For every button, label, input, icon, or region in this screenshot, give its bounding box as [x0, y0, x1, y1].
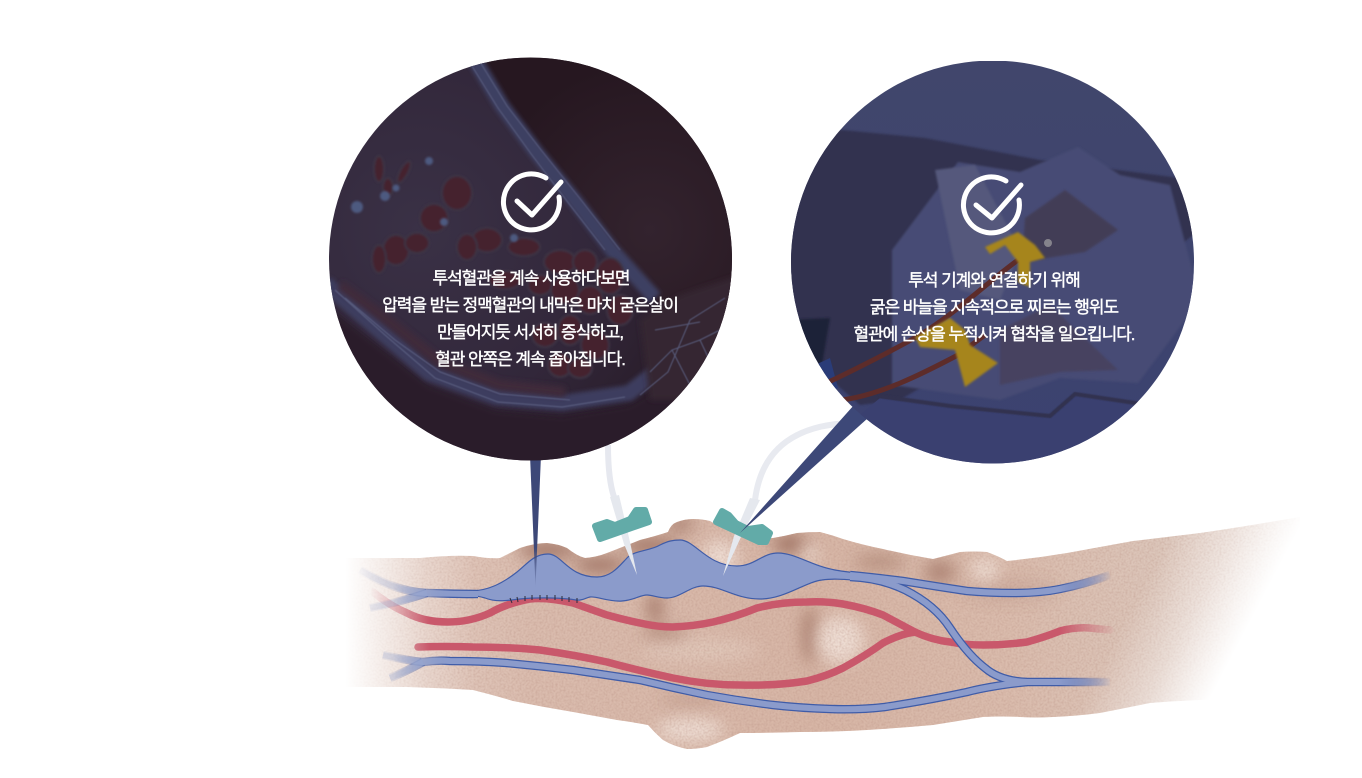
text: left callout [382, 269, 678, 369]
plaque tissue [644, 276, 732, 401]
arm illustration [340, 510, 1300, 755]
arteries [373, 592, 1110, 685]
text: right callout [854, 271, 1135, 344]
icon: check [503, 174, 561, 230]
wing [716, 511, 770, 542]
bottom base [866, 398, 1134, 464]
gauze [892, 147, 1200, 400]
vessel wall upper [476, 62, 655, 298]
platelets [351, 157, 518, 242]
icon: check [963, 177, 1021, 233]
text: right callout: 혈관에 손상을 누적시켜 협착을 일으킵니다. [854, 325, 1135, 344]
pointer: left callout [530, 455, 541, 587]
stitches [510, 595, 577, 603]
callout: needle puncture [785, 61, 1200, 470]
arm [785, 130, 1200, 405]
vessel wall lower [325, 283, 665, 403]
tube [755, 423, 850, 500]
needle shaft [610, 495, 637, 575]
vein fills [360, 570, 1110, 709]
enlarged vein aneurysm [470, 540, 870, 601]
text: left callout: 혈관 안쪽은 계속 좁아집니다. [435, 350, 625, 369]
red blood cells [372, 156, 633, 378]
needle shaft [723, 498, 760, 576]
needle: left [595, 445, 649, 575]
needle: right [716, 423, 850, 576]
text: right callout: 투석 기계와 연결하기 위해 [908, 271, 1080, 290]
callout: intimal hyperplasia [320, 50, 740, 470]
text: left callout: 압력을 받는 정맥혈관의 내막은 마치 굳은살이 [382, 296, 678, 315]
pointer: right callout [740, 405, 868, 533]
yellow tape [985, 232, 1045, 287]
tube [608, 445, 614, 497]
photo: dialysis needles [785, 61, 1200, 470]
text: right callout: 굵은 바늘을 지속적으로 찌르는 행위도 [870, 298, 1118, 317]
needle hub [1044, 239, 1052, 247]
vein outlines [360, 570, 1110, 709]
wing [595, 510, 649, 539]
forearm skin [340, 510, 1300, 755]
photo: blood vessel interior [320, 50, 740, 470]
text: left callout: 투석혈관을 계속 사용하다보면 [432, 269, 630, 288]
text: left callout: 만들어지듯 서서히 증식하고, [437, 323, 623, 342]
tubes [828, 258, 1019, 384]
